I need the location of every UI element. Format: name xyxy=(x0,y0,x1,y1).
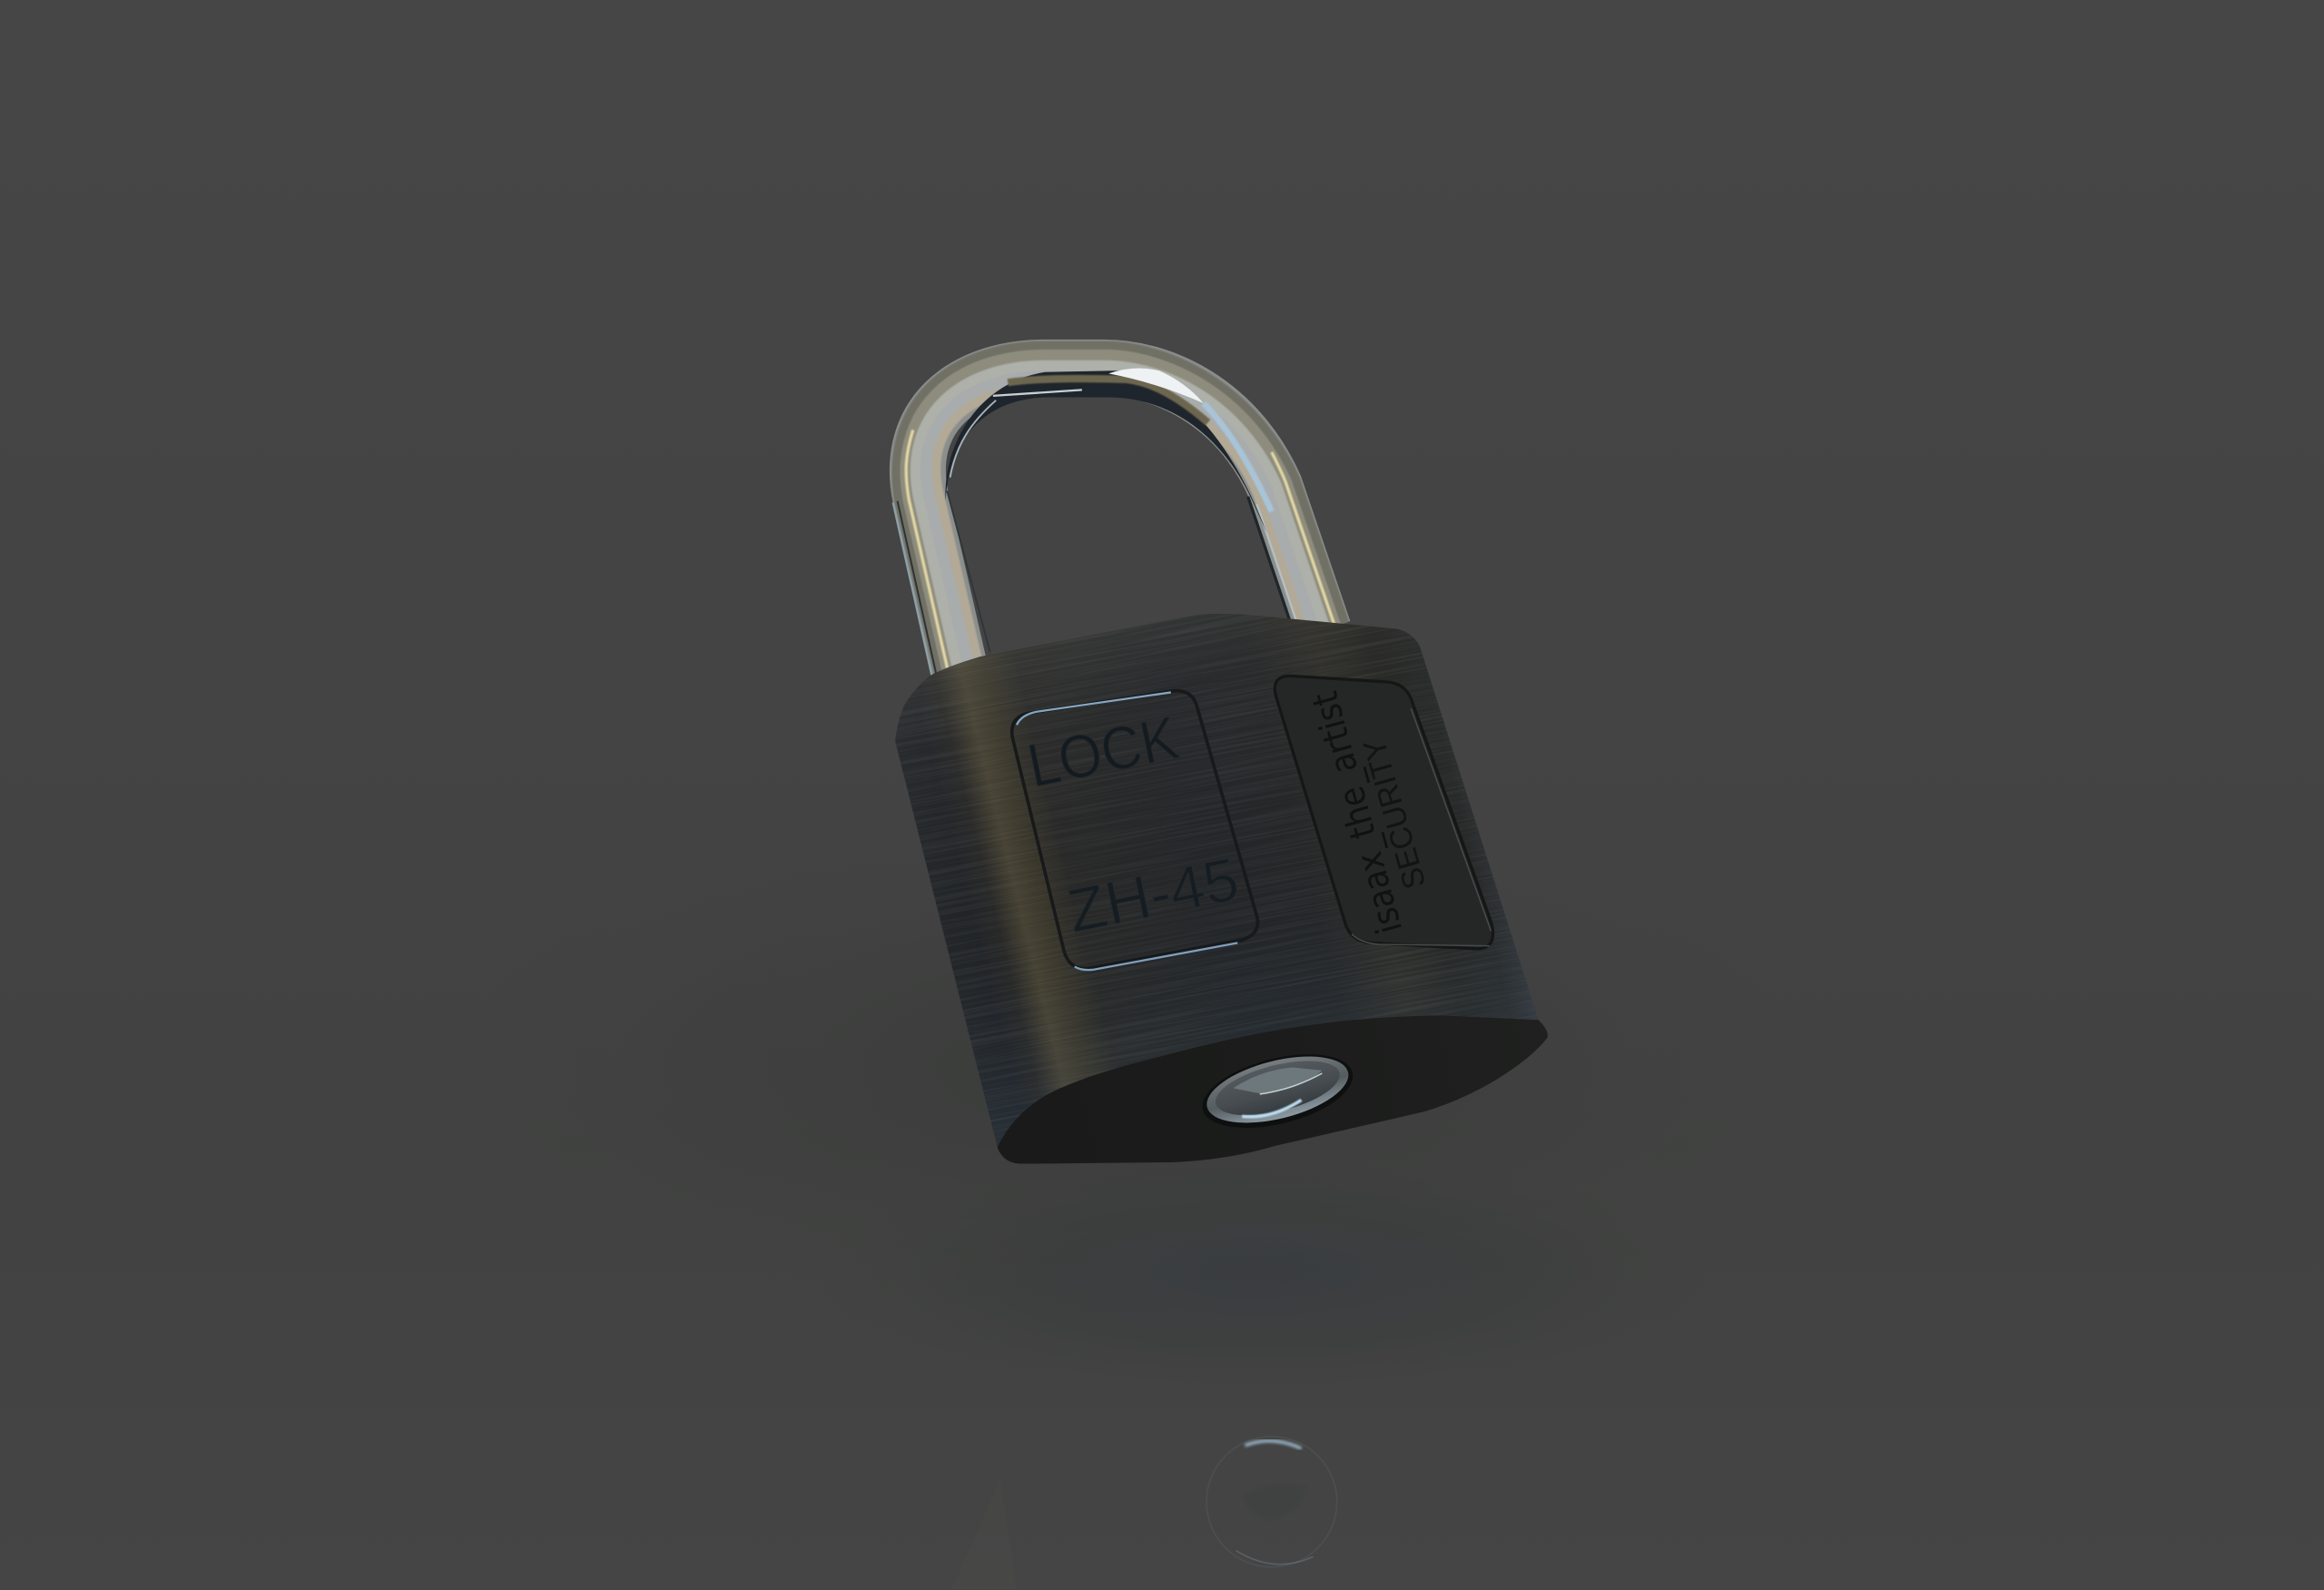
plate rim xyxy=(1275,676,1492,949)
shackle pale band xyxy=(918,368,1324,685)
keyhole face xyxy=(1210,1051,1345,1126)
plate rim highlight xyxy=(1352,708,1491,946)
shackle arch inner dark reflection xyxy=(945,370,1267,534)
shackle arch blue streak xyxy=(1204,403,1272,511)
floor shadow: bluish pool under the lock xyxy=(801,1146,1719,1398)
reflected keyhole highlight xyxy=(1245,1441,1301,1448)
body front xyxy=(895,614,1548,1164)
reflection on the floor xyxy=(951,1437,1337,1589)
shackle arch brass reflection xyxy=(1008,379,1208,422)
plate rim xyxy=(1012,691,1257,969)
shackle brown band xyxy=(906,356,1334,688)
reflected ring lower edge xyxy=(1236,1551,1314,1565)
shackle base tube xyxy=(918,368,1324,685)
keyhole bottom highlight xyxy=(1242,1100,1301,1117)
floor shadow: soft dark pool around the lock xyxy=(415,815,1837,1319)
text ZH-45: ZH-45 xyxy=(1062,844,1245,946)
text isaax_the_artist: isaax_the_artist xyxy=(1305,687,1411,938)
text LOCK: LOCK xyxy=(1022,704,1184,801)
plate bottom highlight xyxy=(1075,943,1237,970)
keyway xyxy=(1233,1067,1322,1094)
body colour xyxy=(895,614,1538,1148)
plate: LOCK ZH-45 xyxy=(1012,691,1257,970)
body vertical shading xyxy=(902,614,1530,1146)
shackle left leg dark outer line xyxy=(898,501,940,689)
keyhole xyxy=(1195,1041,1360,1141)
keyhole dark socket xyxy=(1195,1041,1360,1141)
reflected keyhole ring xyxy=(1206,1437,1337,1567)
reflected keyway xyxy=(1242,1485,1307,1521)
keyway glint xyxy=(1260,1073,1322,1094)
text SECURITY: SECURITY xyxy=(1357,735,1433,893)
shackle right leg steel line xyxy=(1256,504,1297,623)
shackle warm inner band xyxy=(936,387,1305,680)
shackle centre band xyxy=(928,378,1314,683)
keyhole metal ring xyxy=(1200,1044,1355,1135)
shackle right leg dark outer line xyxy=(1248,497,1289,619)
reflected body edge xyxy=(951,1479,1017,1589)
padlock xyxy=(890,340,1548,1164)
shackle arch pale lower streak xyxy=(993,390,1082,396)
shackle arch left pale streak xyxy=(950,400,996,478)
illustration: floating padlock scene xyxy=(890,340,1548,1567)
plate: isaax_the_artist SECURITY xyxy=(1275,676,1492,949)
brushed metal texture xyxy=(896,620,1511,1121)
shackle arch specular xyxy=(1108,369,1204,403)
shackle outer dim band xyxy=(896,345,1344,689)
shackle left leg inner dark line xyxy=(947,490,990,652)
shackle xyxy=(893,345,1344,691)
shackle left leg pale rim xyxy=(893,502,935,691)
bottom face xyxy=(998,1015,1548,1164)
shackle gold highlight on legs xyxy=(906,430,1334,688)
plate top highlight xyxy=(1017,692,1171,725)
